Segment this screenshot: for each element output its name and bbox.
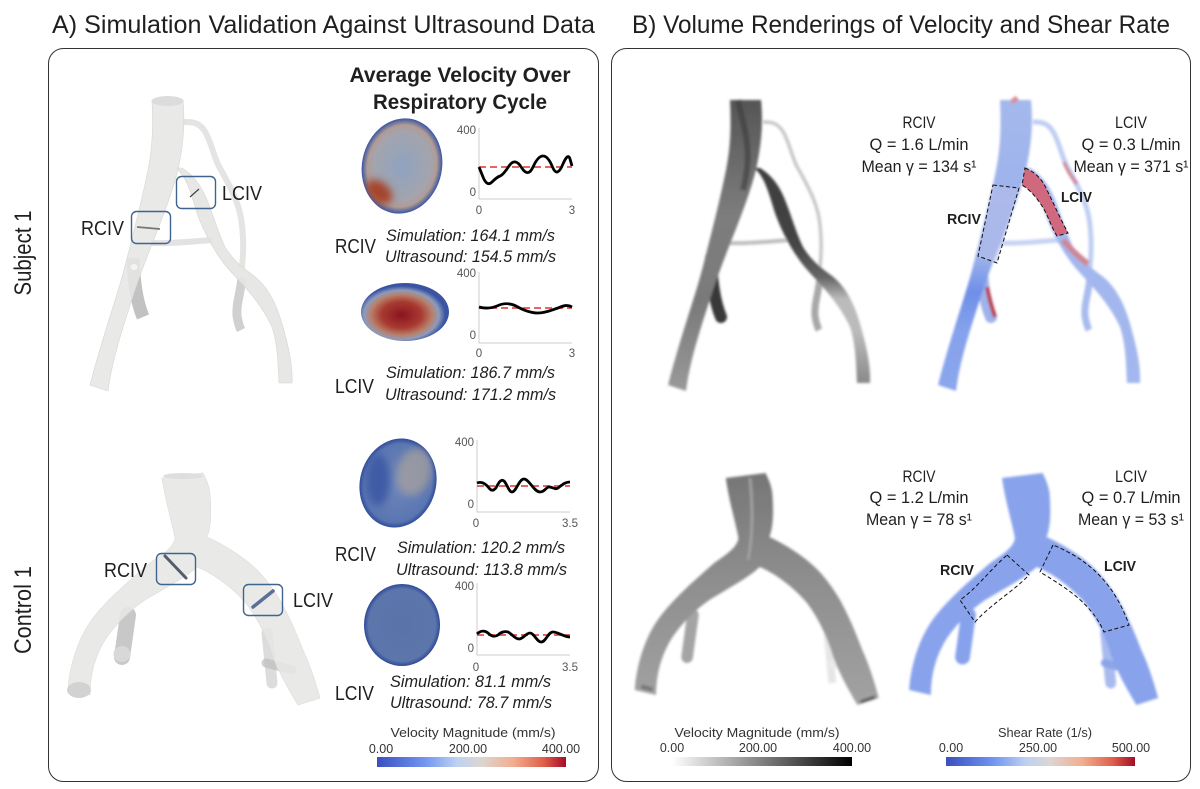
label: bold LCIV subject: LCIV xyxy=(1061,189,1092,206)
label: bold RCIV control: RCIV xyxy=(940,562,974,579)
line chart: subject LCIV velocity: 3 xyxy=(569,348,575,360)
line chart: control RCIV velocity xyxy=(455,437,578,530)
stats: subject RCIV xyxy=(862,113,977,176)
legend: velocity colour bar panel A: Velocity Magnitude (mm/s) xyxy=(390,726,556,740)
legend: shear rate colour bar: Shear Rate (1/s) xyxy=(998,726,1092,740)
line chart: subject RCIV velocity: 0 xyxy=(470,187,476,199)
line chart: control LCIV velocity: 0 xyxy=(473,662,479,674)
text: control LCIV simulation and ultrasound values xyxy=(390,672,552,712)
stats: control RCIV: RCIV xyxy=(902,467,936,486)
stats: subject LCIV: LCIV xyxy=(1115,113,1148,132)
highlighted region: subject RCIV xyxy=(978,185,1019,263)
line chart: subject LCIV velocity: 400 xyxy=(457,268,476,280)
label: RCIV subject: RCIV xyxy=(335,236,377,258)
vessel model: Control 1 xyxy=(67,473,320,705)
stats: control LCIV xyxy=(1078,467,1184,529)
text: control RCIV simulation and ultrasound values: Ultrasound: 113.8 mm/s xyxy=(396,560,567,579)
panel B frame xyxy=(612,48,1190,782)
line chart: subject RCIV velocity: 3 xyxy=(569,205,575,217)
callout: LCIV section box subject: LCIV xyxy=(222,183,263,205)
row label: Control 1: Control 1 xyxy=(10,566,37,654)
callout: LCIV section box control xyxy=(244,584,334,616)
stats: control LCIV: Q = 0.7 L/min xyxy=(1082,488,1180,507)
stats: control LCIV: LCIV xyxy=(1115,467,1148,486)
text: control LCIV simulation and ultrasound values: Ultrasound: 78.7 mm/s xyxy=(390,693,552,712)
legend: shear rate colour bar: 500.00 xyxy=(1112,741,1150,755)
cross-section: control LCIV xyxy=(364,584,440,666)
volume rendering: control shear rate xyxy=(909,473,1158,705)
stats: control RCIV xyxy=(866,467,972,529)
callout: RCIV section box subject xyxy=(81,212,170,244)
line chart: control RCIV velocity: 400 xyxy=(455,437,474,449)
highlighted region: control LCIV xyxy=(1040,545,1129,632)
callout: RCIV section box control xyxy=(104,554,196,584)
vessel model: Subject 1 xyxy=(90,96,292,391)
legend: velocity colour bar panel A: 200.00 xyxy=(449,742,487,756)
cross-section: subject RCIV xyxy=(362,118,442,214)
text: subject LCIV simulation and ultrasound values: Simulation: 186.7 mm/s xyxy=(386,363,555,382)
stats: control RCIV: Mean γ = 78 s¹ xyxy=(866,510,972,529)
legend: velocity colour bar panel B: Velocity Magnitude (mm/s) xyxy=(674,726,840,740)
callout: LCIV section box subject xyxy=(176,176,263,208)
legend: velocity colour bar panel B: 400.00 xyxy=(833,741,871,755)
cross-section: control RCIV xyxy=(359,438,437,528)
line chart: control RCIV velocity: 0 xyxy=(468,499,474,511)
line chart: subject LCIV velocity xyxy=(457,268,575,360)
legend: velocity colour bar panel A: 400.00 xyxy=(542,742,580,756)
text: control RCIV simulation and ultrasound values xyxy=(396,538,567,579)
heading: average velocity over respiratory cycle xyxy=(350,64,570,114)
label: LCIV control: LCIV xyxy=(335,683,375,705)
legend: velocity colour bar panel B xyxy=(660,726,871,766)
line chart: control LCIV velocity: 3.5 xyxy=(562,662,578,674)
line chart: control LCIV velocity xyxy=(455,581,578,674)
stats: subject RCIV: RCIV xyxy=(902,113,936,132)
row label: Subject 1: Subject 1 xyxy=(10,210,37,296)
cross-section: subject LCIV xyxy=(361,283,449,341)
legend: shear rate colour bar: 0.00 xyxy=(939,741,963,755)
heading: average velocity over respiratory cycle: Respiratory Cycle xyxy=(373,91,547,114)
stats: subject LCIV xyxy=(1074,113,1189,176)
text: control RCIV simulation and ultrasound values: Simulation: 120.2 mm/s xyxy=(397,538,565,557)
stats: subject RCIV: Mean γ = 134 s¹ xyxy=(862,157,977,176)
heading: average velocity over respiratory cycle: Average Velocity Over xyxy=(350,64,570,87)
stats: subject LCIV: Q = 0.3 L/min xyxy=(1082,135,1180,154)
title: panel A heading: A) Simulation Validation Against Ultrasound Data xyxy=(52,11,595,39)
text: subject LCIV simulation and ultrasound values: Ultrasound: 171.2 mm/s xyxy=(385,385,556,404)
line chart: control LCIV velocity: 0 xyxy=(468,643,474,655)
line chart: subject RCIV velocity: 400 xyxy=(457,125,476,137)
label: LCIV subject: LCIV xyxy=(335,376,375,398)
text: subject RCIV simulation and ultrasound values xyxy=(385,226,556,266)
label: bold RCIV subject: RCIV xyxy=(947,211,981,228)
line chart: subject LCIV velocity: 0 xyxy=(470,330,476,342)
volume rendering: control velocity xyxy=(635,473,879,705)
label: RCIV control: RCIV xyxy=(335,544,377,566)
text: subject RCIV simulation and ultrasound values: Simulation: 164.1 mm/s xyxy=(386,226,555,245)
callout: RCIV section box control: RCIV xyxy=(104,560,148,582)
text: control LCIV simulation and ultrasound values: Simulation: 81.1 mm/s xyxy=(390,672,551,691)
text: subject RCIV simulation and ultrasound values: Ultrasound: 154.5 mm/s xyxy=(385,247,556,266)
panel A frame xyxy=(48,48,598,782)
legend: shear rate colour bar: 250.00 xyxy=(1019,741,1057,755)
volume rendering: subject velocity xyxy=(668,100,870,391)
line chart: control LCIV velocity: 400 xyxy=(455,581,474,593)
legend: velocity colour bar panel A: 0.00 xyxy=(369,742,393,756)
line chart: subject RCIV velocity: 0 xyxy=(476,205,482,217)
legend: shear rate colour bar xyxy=(939,726,1150,766)
legend: velocity colour bar panel A xyxy=(369,726,580,767)
legend: velocity colour bar panel B: 0.00 xyxy=(660,741,684,755)
highlighted region: control RCIV xyxy=(960,555,1029,622)
stats: control RCIV: Q = 1.2 L/min xyxy=(870,488,968,507)
stats: subject LCIV: Mean γ = 371 s¹ xyxy=(1074,157,1189,176)
volume rendering: subject shear rate xyxy=(938,98,1140,391)
stats: subject RCIV: Q = 1.6 L/min xyxy=(870,135,968,154)
text: subject LCIV simulation and ultrasound values xyxy=(385,363,556,404)
callout: LCIV section box control: LCIV xyxy=(293,590,334,612)
stats: control LCIV: Mean γ = 53 s¹ xyxy=(1078,510,1184,529)
title: panel B heading: B) Volume Renderings of Velocity and Shear Rate xyxy=(632,11,1170,39)
legend: velocity colour bar panel B: 200.00 xyxy=(739,741,777,755)
callout: RCIV section box subject: RCIV xyxy=(81,218,125,240)
line chart: subject LCIV velocity: 0 xyxy=(476,348,482,360)
line chart: control RCIV velocity: 0 xyxy=(473,518,479,530)
line chart: control RCIV velocity: 3.5 xyxy=(562,518,578,530)
label: bold LCIV control: LCIV xyxy=(1104,558,1136,575)
line chart: subject RCIV velocity xyxy=(457,125,575,217)
highlighted region: subject LCIV xyxy=(1022,168,1068,236)
